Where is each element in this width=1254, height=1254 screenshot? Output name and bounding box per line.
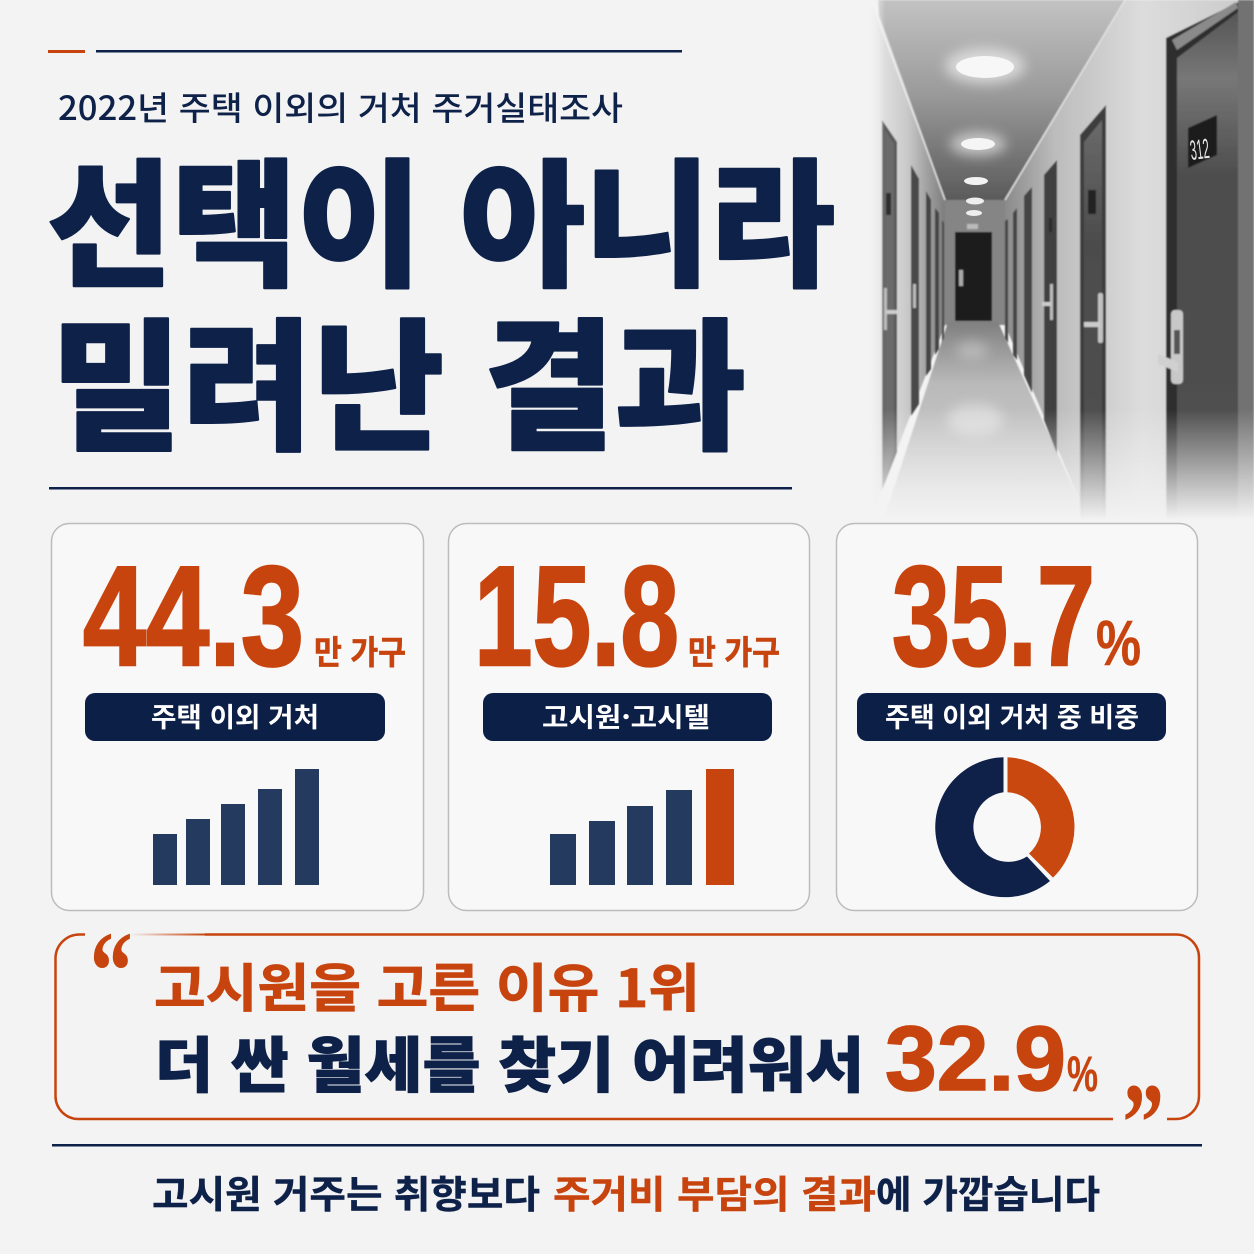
- panel: 44.3: [52, 524, 424, 910]
- conclusion: 고시원 거주는 취향보다: [152, 1164, 540, 1219]
- conclusion: [152, 1164, 1100, 1219]
- panel: 15.8: [448, 524, 810, 910]
- label pill: [857, 693, 1166, 741]
- subtitle: 2022년 주택 이외의 거처 주거실태조사: [58, 82, 623, 130]
- callout border: [56, 934, 1199, 1119]
- callout: reason: [56, 909, 1199, 1186]
- conclusion: 에 가깝습니다: [876, 1164, 1100, 1219]
- title: [47, 115, 835, 479]
- bar chart: [550, 769, 734, 885]
- panel: 35.7: [836, 524, 1198, 910]
- callout value: 32.9: [885, 1008, 1066, 1110]
- unit: 만 가구: [314, 626, 406, 674]
- title underline: [49, 487, 792, 490]
- unit: 만 가구: [688, 626, 780, 674]
- label pill: [85, 693, 385, 741]
- title: 밀려난 결과: [51, 273, 746, 479]
- callout statement: 더 싼 월세를 찾기 어려워서: [155, 1018, 864, 1105]
- faded border segment: [130, 934, 205, 936]
- bar chart: [153, 769, 319, 885]
- conclusion: 주거비 부담의 결과: [553, 1164, 876, 1219]
- label pill: 주택 이외 거처 중 비중: [885, 696, 1139, 735]
- label pill: [483, 693, 772, 741]
- closing quote mark: ”: [1122, 1060, 1164, 1186]
- bottom divider: [52, 1144, 1202, 1146]
- value: 35.7: [892, 537, 1095, 696]
- value: 44.3: [83, 537, 304, 696]
- callout unit: %: [1067, 1046, 1098, 1102]
- label pill: 고시원·고시텔: [542, 696, 710, 735]
- photo: corridor with doors: 312: [1188, 133, 1211, 166]
- value: 15.8: [474, 537, 679, 696]
- title: 선택이 아니라: [47, 115, 835, 315]
- top accent rules: [48, 50, 682, 53]
- label pill: 주택 이외 거처: [151, 696, 319, 735]
- unit: %: [1096, 607, 1141, 679]
- callout heading: 고시원을 고른 이유 1위: [154, 947, 700, 1022]
- donut chart: [935, 757, 1074, 897]
- opening quote mark: “: [90, 909, 133, 1034]
- photo: corridor with doors: [870, 0, 1254, 525]
